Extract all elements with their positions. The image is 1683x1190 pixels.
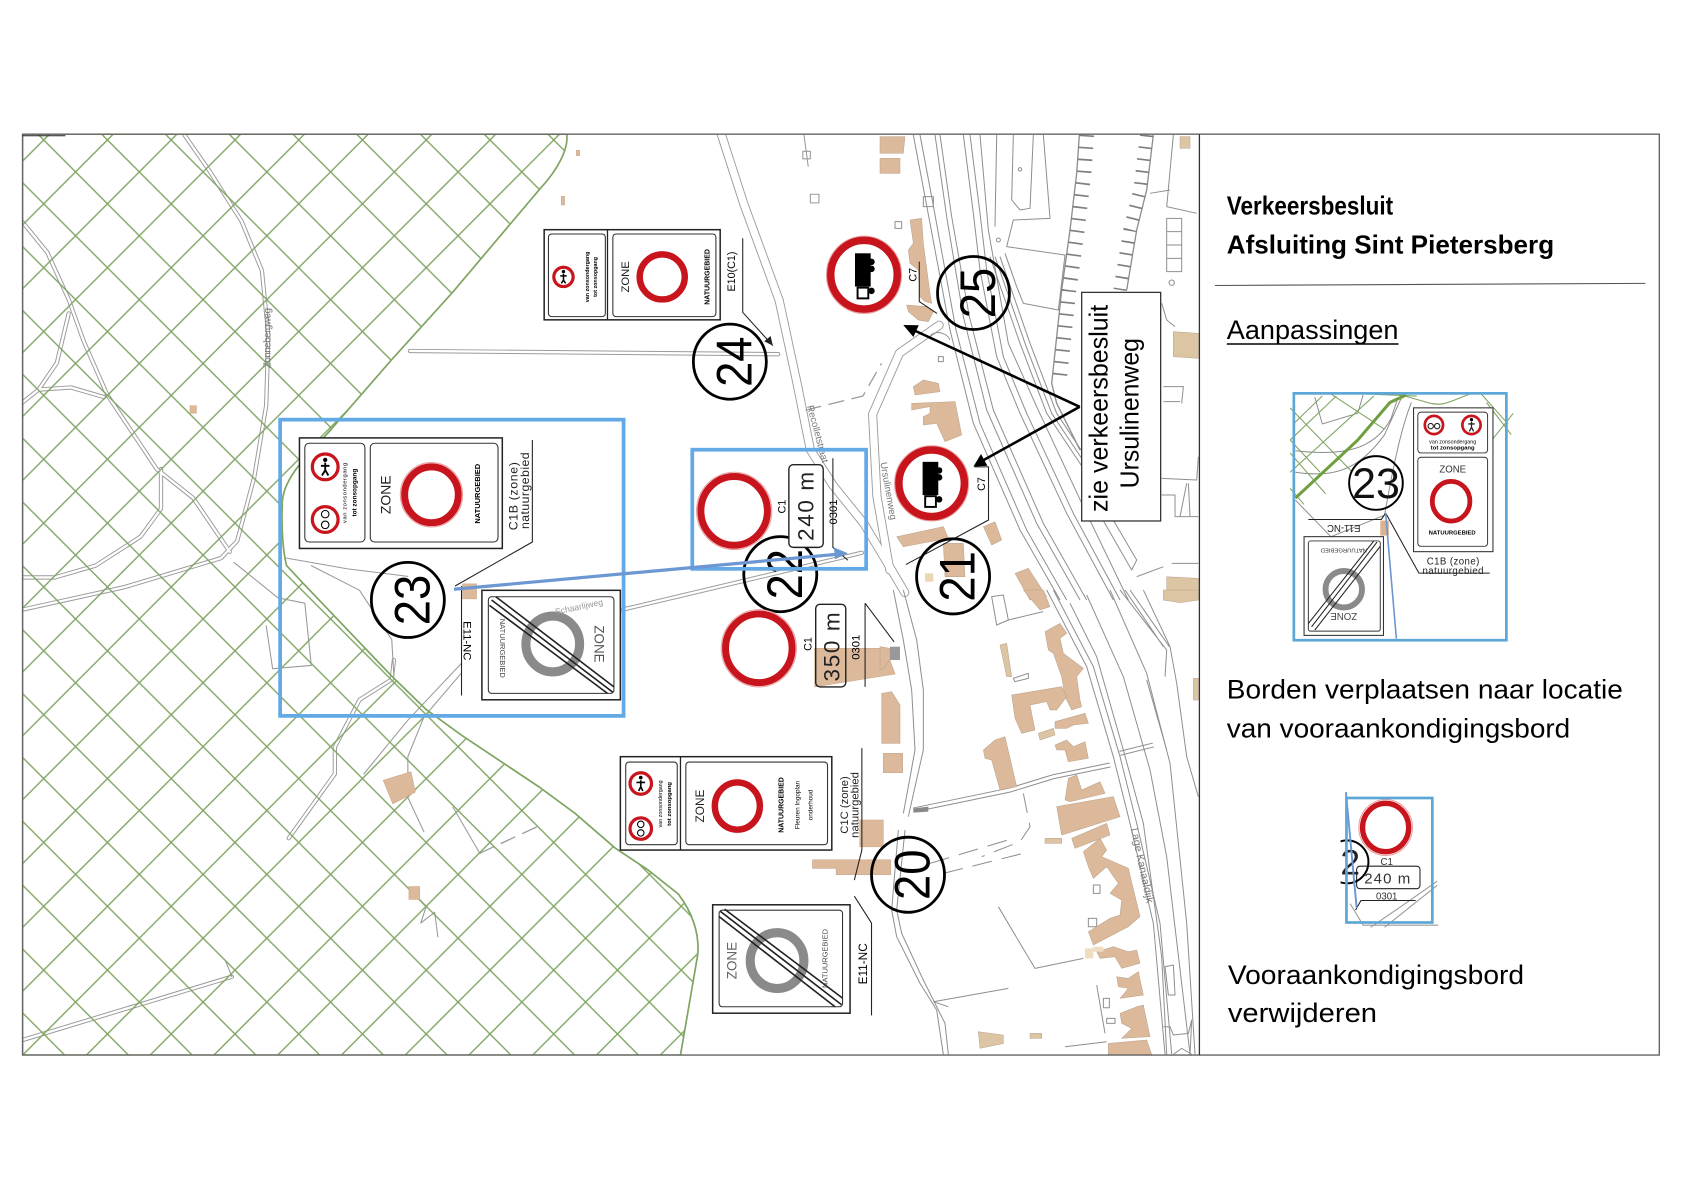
marker 25: 25 bbox=[949, 268, 1006, 318]
truck sign top bbox=[826, 236, 902, 313]
sign group 20: ZONE bbox=[693, 790, 707, 822]
roads bbox=[23, 134, 939, 1040]
blue box around sign 22 bbox=[692, 450, 866, 569]
sign group 23: tot zonsopgang bbox=[351, 469, 358, 517]
sign group 20: Fleuren Ingoplan bbox=[795, 780, 802, 829]
arrows to truck signs bbox=[903, 325, 1080, 467]
marker 24: 24 bbox=[705, 336, 762, 387]
callout zie verkeersbesluit bbox=[1082, 292, 1161, 521]
frame bbox=[23, 134, 1659, 1055]
sign group 20: natuurgebied bbox=[850, 772, 862, 838]
pre-announcement sign 350 m: 0301 bbox=[851, 635, 863, 660]
pre-announcement sign 350 m: C1 bbox=[802, 637, 814, 651]
sign group 20: tot zonsopgang bbox=[667, 782, 673, 826]
sign group 23: NATUURGEBIED bbox=[473, 463, 482, 524]
thumbnail: relocated signs 23 bbox=[1290, 393, 1513, 640]
sign group 23: ZONE bbox=[378, 475, 394, 514]
thumbnail: relocated signs 23: ZONE bbox=[1439, 464, 1467, 475]
marker 22 bbox=[744, 537, 817, 612]
marker 25 bbox=[938, 257, 1009, 330]
thumbnail: pre-announcement sign: 240 m bbox=[1364, 870, 1411, 887]
sign group 20 bbox=[620, 748, 862, 880]
callout zie verkeersbesluit: zie verkeersbesluit bbox=[1085, 305, 1113, 512]
tan buildings south-east bbox=[880, 590, 1198, 1054]
pre-announcement sign 240 m: 0301 bbox=[828, 499, 840, 524]
sign group 24: van zonsondergang bbox=[585, 252, 591, 302]
blue box around sign 23 bbox=[280, 420, 624, 716]
callout zie verkeersbesluit: Ursulinenweg bbox=[1116, 338, 1144, 488]
rail and streets south-east bbox=[892, 590, 1198, 1054]
text: borden verplaatsen bbox=[1227, 675, 1623, 743]
blue arrow move signs bbox=[454, 547, 848, 589]
end-of-zone sign 23: E11-NC bbox=[461, 621, 473, 660]
marker 24 bbox=[693, 324, 766, 399]
thumbnail: pre-announcement sign: 2 bbox=[1340, 843, 1360, 883]
thumbnail: relocated signs 23: NATUURGEBIED bbox=[1429, 531, 1476, 537]
end-of-zone sign 20 bbox=[713, 896, 872, 1015]
thumbnail: pre-announcement sign bbox=[1340, 792, 1438, 928]
sign group 24: ZONE bbox=[620, 261, 632, 293]
pre-announcement sign 350 m bbox=[721, 603, 894, 687]
marker 22: 22 bbox=[756, 549, 813, 599]
thumbnail: relocated signs 23: E11-NC bbox=[1327, 522, 1361, 533]
road names bbox=[262, 308, 1156, 905]
thumbnail: relocated signs 23: 23 bbox=[1352, 460, 1400, 508]
sign group 23: van zonsondergang bbox=[343, 462, 349, 523]
thumbnail: pre-announcement sign: 0301 bbox=[1376, 891, 1397, 902]
end-of-zone sign 23: NATUURGEBIED bbox=[498, 619, 507, 678]
marker 23 bbox=[371, 562, 444, 638]
label C7 top bbox=[908, 262, 937, 313]
road names: Ursulinenweg bbox=[877, 461, 898, 521]
thumbnail: relocated signs 23: natuurgebied bbox=[1423, 566, 1484, 577]
thumbnail: relocated signs 23: van zonsondergang bbox=[1429, 439, 1476, 445]
road names: Zonnebergweg bbox=[262, 308, 273, 368]
pre-announcement sign 240 m bbox=[697, 458, 848, 560]
truck sign lower bbox=[895, 446, 969, 521]
sign group 24 bbox=[544, 230, 773, 346]
end-of-zone sign 20: ZONE bbox=[724, 942, 739, 979]
sign group 23 bbox=[299, 438, 532, 586]
label C7 lower bbox=[906, 467, 989, 565]
text: borden verplaatsen: van vooraankondigingsbord bbox=[1227, 713, 1570, 743]
text: borden verplaatsen: Borden verplaatsen naar locatie bbox=[1227, 675, 1623, 705]
marker 20 bbox=[872, 837, 945, 912]
marker 21 bbox=[917, 539, 990, 614]
tan buildings west bbox=[190, 150, 895, 899]
label C7 lower: C7 bbox=[976, 477, 988, 491]
sign group 20: NATUURGEBIED bbox=[779, 777, 786, 833]
sign group 20: van zonsondergang bbox=[658, 780, 664, 827]
thumbnail: relocated signs 23: ZONE bbox=[1330, 610, 1357, 621]
thumbnail: pre-announcement sign: C1 bbox=[1381, 857, 1393, 868]
title: Afsluiting Sint Pietersberg bbox=[1227, 231, 1554, 259]
green nature area hatch bbox=[23, 134, 698, 1055]
road names: Recolletstraat bbox=[804, 404, 830, 464]
sign group 24: E10(C1) bbox=[726, 252, 738, 292]
end-of-zone sign 23: ZONE bbox=[592, 625, 607, 663]
tan buildings north-east bbox=[880, 137, 1198, 600]
thumbnail: relocated signs 23: NATUURGEBIED bbox=[1321, 546, 1367, 552]
sign group 24: tot zonsopgang bbox=[593, 257, 599, 297]
sign group 23: C1B (zone) bbox=[506, 461, 520, 530]
rail and streets north-east bbox=[895, 135, 1198, 600]
pre-announcement sign 240 m: C1 bbox=[777, 500, 789, 513]
text: vooraankondigingsbord verwijderen: verwijderen bbox=[1228, 998, 1377, 1028]
thumbnail: relocated signs 23: C1B (zone) bbox=[1427, 557, 1480, 568]
map panel bbox=[23, 134, 1198, 1055]
end-of-zone sign 20: NATUURGEBIED bbox=[821, 928, 830, 988]
text: vooraankondigingsbord verwijderen: Vooraankondigingsbord bbox=[1228, 960, 1524, 990]
title bbox=[1227, 193, 1554, 259]
sign group 20: onderhoud bbox=[807, 789, 814, 820]
pre-announcement sign 350 m: 350 m bbox=[819, 611, 844, 681]
marker 23: 23 bbox=[383, 575, 440, 625]
side panel bbox=[1215, 193, 1645, 1028]
thumbnail: relocated signs 23: tot zonsopgang bbox=[1431, 446, 1475, 452]
end-of-zone sign 23: Schaarlijweg bbox=[554, 597, 604, 617]
text: vooraankondigingsbord verwijderen bbox=[1228, 960, 1524, 1028]
marker 21: 21 bbox=[929, 551, 986, 602]
pre-announcement sign 240 m: 240 m bbox=[794, 470, 819, 541]
title: Verkeersbesluit bbox=[1227, 193, 1394, 221]
label C7 top: C7 bbox=[908, 268, 920, 282]
sign group 24: NATUURGEBIED bbox=[704, 249, 711, 305]
end-of-zone sign 20: E11-NC bbox=[856, 943, 870, 984]
end-of-zone sign 23 bbox=[461, 586, 620, 700]
marker 20: 20 bbox=[883, 850, 940, 900]
sign group 20: C1C (zone) bbox=[839, 776, 851, 834]
road names: Lage Kanaaldijk bbox=[1128, 827, 1156, 905]
sign group 23: natuurgebied bbox=[518, 452, 532, 529]
heading aanpassingen: Aanpassingen bbox=[1227, 315, 1399, 345]
